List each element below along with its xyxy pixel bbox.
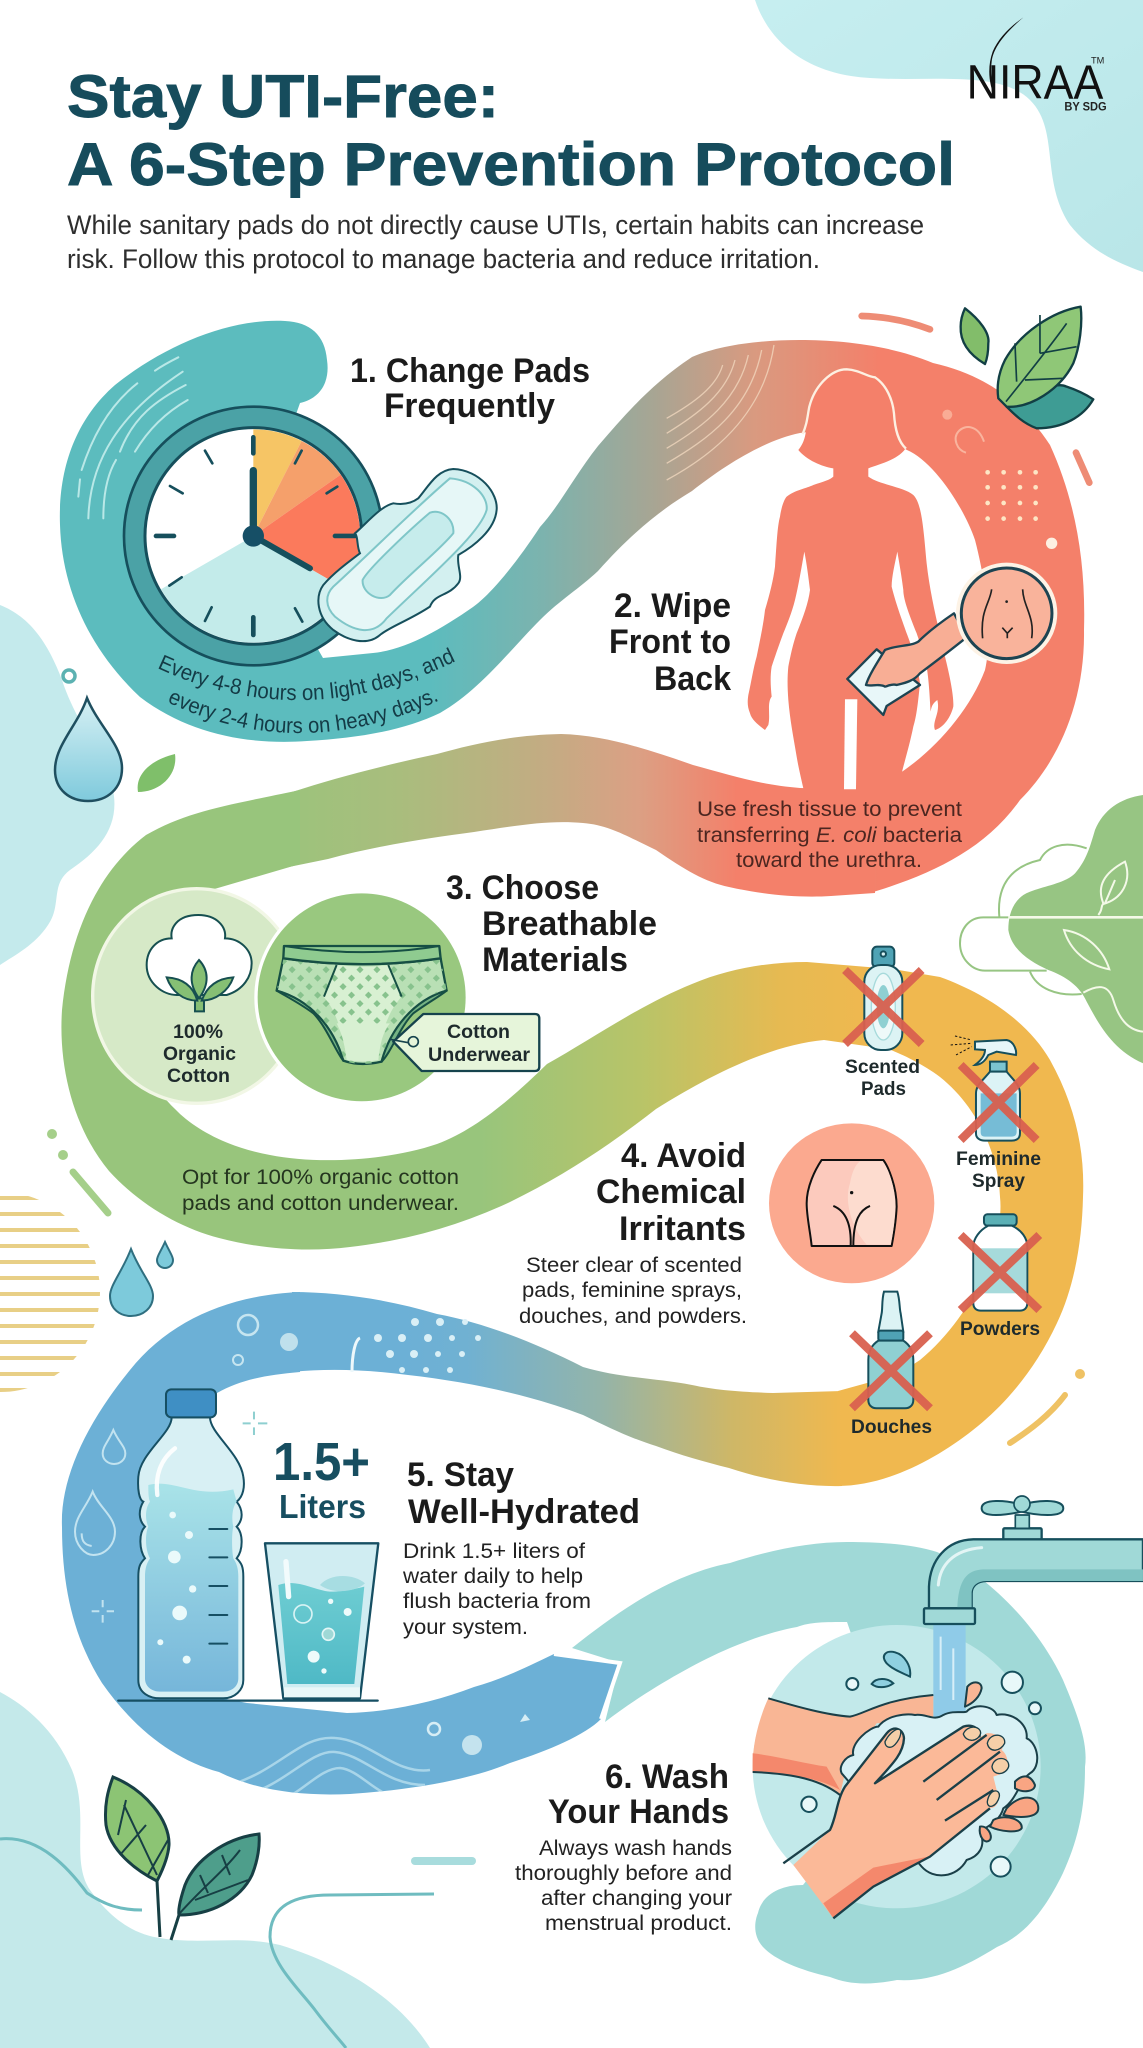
title: Stay UTI-Free: — [67, 63, 499, 130]
background shape: green cloud right — [960, 795, 1143, 1063]
splashes and bubbles — [801, 1652, 1041, 1877]
text: step 5 description — [402, 1539, 591, 1639]
text: step 2 description — [697, 797, 962, 872]
icon: wipe — [847, 649, 920, 715]
text: step 4 description: douches, and powders. — [519, 1304, 747, 1328]
logo: Niraa by SDG — [967, 17, 1107, 113]
icon: foam — [841, 1706, 1037, 1875]
icon: bottom left leaves — [105, 1777, 259, 1940]
heading: step 3: 3. Choose — [446, 869, 599, 907]
label: douches: Douches — [851, 1417, 932, 1438]
text: step 6 description: menstrual product. — [545, 1911, 732, 1935]
label: 1.5+ liters: Liters — [279, 1488, 366, 1525]
subtitle — [67, 210, 924, 274]
text: step 4 description: pads, feminine sprays, — [522, 1278, 742, 1302]
clock sector: pale — [161, 536, 346, 643]
text: step 2 description: transferring E. coli bacteria — [697, 823, 962, 847]
heading: step 4: Irritants — [619, 1210, 746, 1248]
icon: hips — [807, 1160, 897, 1246]
small drop: left — [55, 698, 122, 801]
heading: step 3: Breathable — [482, 905, 657, 943]
heading: step 1 — [350, 352, 590, 425]
tag: cotton underwear — [393, 1014, 539, 1071]
text: step 4 description: Steer clear of scented — [526, 1253, 742, 1277]
icon: front hand — [783, 1726, 1009, 1918]
heading: step 6: 6. Wash — [605, 1758, 729, 1796]
heading: step 2: Front to — [609, 623, 731, 661]
underwear circle — [254, 890, 469, 1105]
ribbon: blue loop — [62, 1292, 620, 1794]
ribbon: green to gold — [61, 790, 880, 1250]
icon: magnifier — [956, 563, 1057, 664]
clock sector: orange — [253, 441, 341, 536]
label: organic cotton: Organic — [163, 1044, 236, 1065]
text: step 5 description: Drink 1.5+ liters of — [403, 1539, 585, 1563]
blue ribbon icons — [75, 1430, 125, 1623]
text: step 5 description: your system. — [403, 1615, 528, 1639]
heading: step 2 — [609, 587, 731, 698]
green dots: left — [47, 1129, 68, 1160]
ribbon: coral to green — [250, 734, 875, 897]
background blob: bottom left — [0, 1692, 430, 2048]
icon: bottle — [138, 1389, 244, 1698]
heading: step 4: 4. Avoid — [621, 1137, 746, 1175]
text: step 5 description: flush bacteria from — [403, 1589, 591, 1613]
logo: Niraa by SDG: TM — [1091, 55, 1104, 65]
ribbon: gold to blue — [292, 1292, 842, 1486]
pale circle — [753, 1625, 1041, 1908]
text: step 6 description — [515, 1836, 732, 1935]
icon: faucet — [924, 1496, 1143, 1624]
label: 1.5+ liters — [273, 1432, 370, 1525]
coral dashes — [862, 316, 1089, 483]
text: step 1 curved description — [158, 647, 455, 734]
icon: back hand — [753, 1682, 982, 1795]
text: step 6 description: thoroughly before and — [515, 1861, 732, 1885]
ribbon: teal to coral — [60, 321, 1084, 893]
text: step 3 description — [182, 1165, 459, 1215]
gold decoration lower right — [1010, 1369, 1085, 1443]
background blob: left middle — [0, 605, 114, 965]
label: scented pads — [845, 1057, 920, 1100]
small leaf: left — [138, 754, 175, 792]
heading: step 4: Chemical — [596, 1173, 746, 1211]
label: scented pads: Scented — [845, 1057, 920, 1078]
logo: Niraa by SDG: NIRAA — [967, 56, 1104, 110]
heading: step 6 — [548, 1758, 729, 1831]
label: feminine spray: Feminine — [956, 1149, 1041, 1170]
icon: douche bottle — [868, 1292, 913, 1408]
step 6: handwashing illustration — [753, 1496, 1143, 1918]
heading: step 6: Your Hands — [548, 1793, 729, 1831]
title: A 6-Step Prevention Protocol — [67, 131, 955, 198]
blue ribbon decorations — [230, 1315, 530, 1800]
icon: teal brush strokes — [78, 357, 188, 518]
ribbon arrow tip outline — [554, 1654, 620, 1719]
text: step 4 description — [519, 1253, 747, 1328]
label: organic cotton: 100% — [173, 1022, 223, 1043]
label: feminine spray — [956, 1149, 1041, 1192]
label: feminine spray: Spray — [972, 1171, 1025, 1192]
icon: top right leaves — [961, 307, 1093, 428]
subtitle: risk. Follow this protocol to manage bacteria and reduce irritation. — [67, 244, 820, 274]
text: step 1 curved description: Every 4-8 hours on light days, and — [158, 647, 455, 702]
icon: water stream — [933, 1624, 966, 1721]
label: powders: Powders — [960, 1319, 1040, 1340]
gusset strip — [844, 699, 857, 789]
clock ticks — [156, 437, 355, 635]
dash: bottom pale — [415, 1857, 472, 1865]
text: step 3 description: Opt for 100% organic cotton — [182, 1165, 459, 1189]
background blob: top right — [755, 0, 1143, 272]
drops: lower left — [110, 1242, 173, 1316]
green dash: left — [73, 1172, 108, 1213]
heading: step 1: Frequently — [384, 387, 555, 425]
label: organic cotton — [163, 1022, 236, 1087]
icon: spray bottle — [951, 1036, 1020, 1141]
clock sector: red — [253, 475, 360, 589]
icon: powder bottle — [973, 1214, 1027, 1311]
crosses — [845, 970, 1039, 1408]
step 4: irritant icons — [769, 947, 1039, 1408]
heading: step 3: Materials — [482, 941, 628, 979]
label: organic cotton: Cotton — [167, 1066, 230, 1087]
icon: back fingers — [980, 1776, 1038, 1841]
text: step 2 description: toward the urethra. — [736, 848, 922, 872]
heading: step 5 — [407, 1456, 640, 1531]
subtitle: While sanitary pads do not directly cause UTIs, certain habits can increase — [67, 210, 924, 240]
label: 1.5+ liters: 1.5+ — [273, 1432, 370, 1492]
logo: Niraa by SDG: BY SDG — [1064, 99, 1107, 113]
heading: step 2: 2. Wipe — [614, 587, 731, 625]
heading: step 5: 5. Stay — [407, 1456, 514, 1494]
step 5: bottle and glass — [75, 1389, 378, 1701]
hips circle — [769, 1123, 934, 1283]
coral decorations — [942, 410, 952, 420]
label: cotton underwear: Cotton — [447, 1022, 510, 1043]
icon: arm — [866, 613, 967, 687]
small ring: left — [63, 670, 75, 682]
icon: scented pad — [864, 947, 902, 1050]
silhouette — [748, 369, 953, 807]
clock sector: yellow — [253, 429, 302, 536]
heading: step 4 — [596, 1137, 746, 1248]
label: cotton underwear — [428, 1022, 531, 1066]
step 2: body silhouette and details — [667, 316, 1089, 807]
shelf — [118, 1697, 378, 1704]
decorative concentric arcs — [667, 345, 774, 480]
label: cotton underwear: Underwear — [428, 1045, 531, 1066]
step 3: circles — [93, 889, 539, 1105]
decorative yellow stripes left — [0, 1198, 110, 1390]
lines: bottom left teal — [0, 1839, 434, 2048]
step 1: clock — [124, 407, 383, 665]
ribbon: pale teal arc — [572, 1542, 1086, 1983]
heading: step 1: 1. Change Pads — [350, 352, 590, 390]
text: step 5 description: water daily to help — [402, 1564, 583, 1588]
icon: glass — [265, 1543, 378, 1698]
text: step 3 description: pads and cotton underwear. — [182, 1191, 459, 1215]
text: step 6 description: Always wash hands — [539, 1836, 732, 1860]
text: step 6 description: after changing your — [541, 1886, 732, 1910]
label: scented pads: Pads — [861, 1079, 906, 1100]
heading: step 5: Well-Hydrated — [408, 1493, 640, 1531]
heading: step 3 — [446, 869, 657, 979]
text: step 2 description: Use fresh tissue to prevent — [697, 797, 962, 821]
text: step 1 curved description: every 2-4 hours on heavy days. — [169, 693, 438, 734]
ribbon: gold arc — [838, 966, 1083, 1486]
cotton circle — [93, 889, 301, 1103]
title — [67, 63, 955, 198]
icon: underwear — [277, 946, 447, 1064]
heading: step 2: Back — [654, 660, 731, 698]
icon: cotton boll — [147, 915, 252, 1011]
icon: sanitary pad — [318, 469, 497, 641]
head outline — [803, 369, 906, 449]
